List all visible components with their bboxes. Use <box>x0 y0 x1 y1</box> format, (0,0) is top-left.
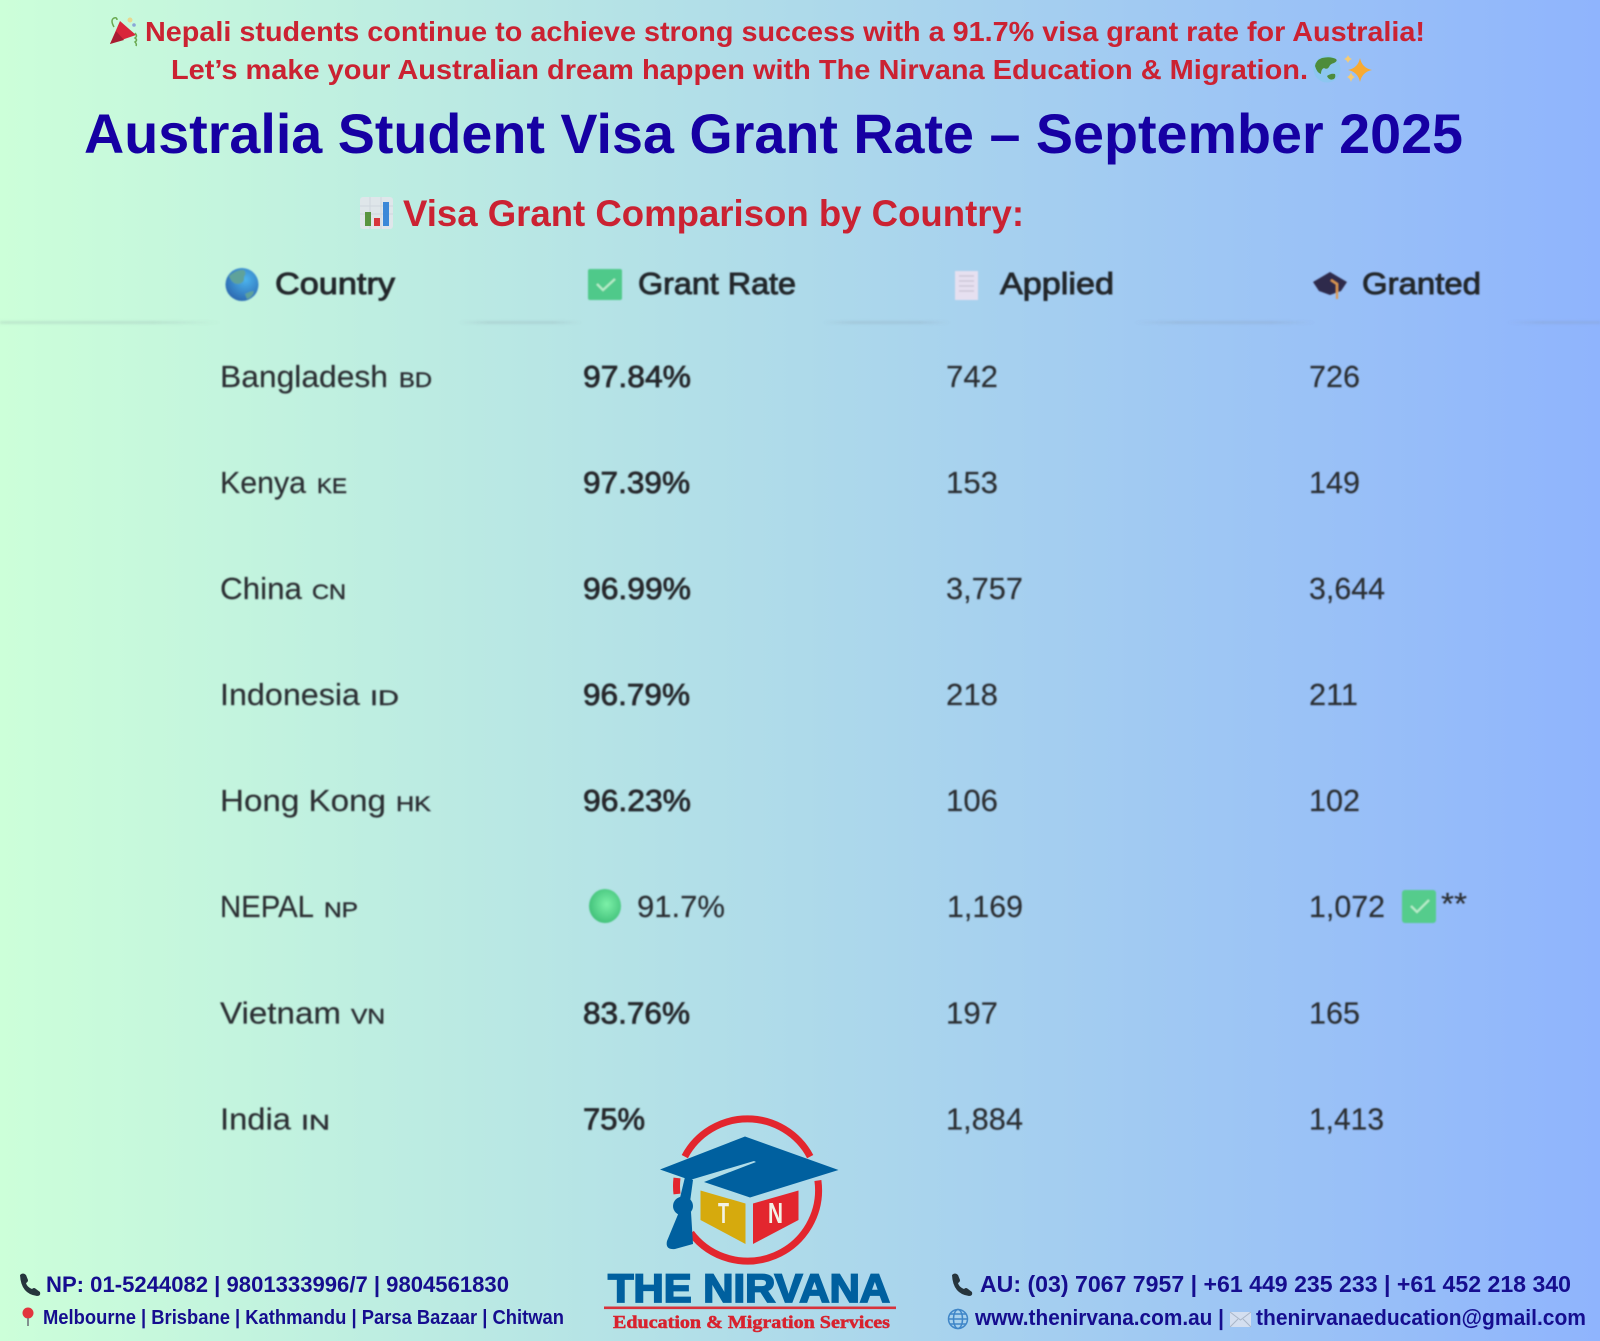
headline line 2: Let’s make your Australian dream happen with The Nirvana Education & Migration. <box>171 54 1308 85</box>
row: Kenya <box>220 465 1360 500</box>
email: thenirvanaeducation@gmail.com <box>1256 1305 1586 1330</box>
row: India <box>220 1102 1384 1136</box>
row: Vietnam: Vietnam <box>220 996 341 1030</box>
row: Kenya: Kenya <box>220 465 307 500</box>
row: India: 1,413 <box>1309 1102 1384 1136</box>
logo: The Nirvana <box>604 1119 896 1332</box>
row: Hong Kong: HK <box>396 793 431 816</box>
header: granted: Granted <box>1362 267 1481 301</box>
logo wordmark: THE NIRVANA <box>608 1267 890 1311</box>
row: Vietnam: 197 <box>946 996 998 1030</box>
row: Bangladesh: 97.84% <box>583 359 691 394</box>
row: Nepal: ** <box>1441 886 1467 921</box>
icon: web globe <box>948 1310 968 1328</box>
row: Indonesia: 211 <box>1309 677 1358 712</box>
row: India: 75% <box>583 1102 645 1136</box>
icon: green circle <box>589 889 621 923</box>
row: Hong Kong: 106 <box>946 783 998 818</box>
row: Kenya: 97.39% <box>583 465 690 500</box>
logo: yellow page <box>700 1190 746 1244</box>
row: Indonesia: 96.79% <box>583 677 690 712</box>
header: grant rate: Grant Rate <box>638 267 796 301</box>
row: India: India <box>220 1102 292 1136</box>
row: Nepal: 91.7% <box>637 889 725 924</box>
row: Nepal <box>220 886 1467 924</box>
row: China: CN <box>312 581 346 604</box>
icon: sparkles <box>1344 55 1372 82</box>
row: India: 1,884 <box>946 1102 1023 1136</box>
row: Bangladesh <box>220 359 1360 394</box>
row: China: 3,644 <box>1309 571 1385 606</box>
logo tagline: Education & Migration Services <box>613 1312 890 1332</box>
Australia phone numbers: AU: (03) 7067 7957 | +61 449 235 233 | +61 452 218 340 <box>980 1271 1571 1297</box>
row: Bangladesh: Bangladesh <box>220 359 388 394</box>
row: Nepal: 1,169 <box>947 889 1023 924</box>
row: Hong Kong: Hong Kong <box>220 783 386 818</box>
table: visa grant comparison <box>0 267 1600 1136</box>
icon: phone <box>20 1274 40 1296</box>
icon: bar chart <box>360 197 393 229</box>
row: Indonesia: 218 <box>946 677 998 712</box>
row: Nepal: 1,072 <box>1309 889 1385 924</box>
footer contacts: Nepal <box>20 1272 564 1329</box>
Nepal phone numbers: NP: 01-5244082 | 9801333996/7 | 9804561830 <box>46 1272 509 1297</box>
icon: globe header <box>226 268 258 301</box>
row: Indonesia <box>220 677 1358 712</box>
subheading <box>360 193 1024 234</box>
table header <box>0 267 1600 324</box>
footer contacts: Australia <box>948 1271 1586 1330</box>
row: China: 96.99% <box>583 571 691 606</box>
icon: check mark header <box>588 269 622 300</box>
icon: globe <box>1314 56 1340 82</box>
intro message <box>110 16 1425 85</box>
row: Hong Kong <box>220 783 1360 818</box>
icon: map pin <box>22 1308 34 1326</box>
office locations: Melbourne | Brisbane | Kathmandu | Parsa Bazaar | Chitwan <box>43 1307 564 1329</box>
icon: party popper <box>110 18 136 46</box>
comparison heading: Visa Grant Comparison by Country: <box>403 193 1024 234</box>
row: Indonesia: Indonesia <box>220 677 361 712</box>
row: Indonesia: ID <box>370 687 399 710</box>
icon: check mark <box>1402 890 1436 923</box>
row: Vietnam: 83.76% <box>583 996 690 1030</box>
title: Australia Student Visa Grant Rate – September 2025 <box>84 102 1463 165</box>
logo: red page <box>753 1190 798 1244</box>
row: Bangladesh: 726 <box>1309 359 1360 394</box>
logo: letter T: T <box>718 1198 729 1230</box>
icon: graduation cap <box>1313 272 1347 299</box>
row: Nepal: NP <box>324 899 358 922</box>
logo: letter N: N <box>768 1198 783 1230</box>
row: Nepal: NEPAL <box>220 889 314 924</box>
row: Kenya: 153 <box>946 465 998 500</box>
icon: envelope <box>1230 1312 1251 1327</box>
icon: document <box>955 271 978 300</box>
row: Bangladesh: BD <box>399 369 432 392</box>
row: Hong Kong: 96.23% <box>583 783 691 818</box>
row: China <box>220 571 1385 606</box>
row: Bangladesh: 742 <box>946 359 998 394</box>
row: Vietnam: VN <box>351 1006 385 1028</box>
header: applied: Applied <box>1000 267 1114 301</box>
logo ring <box>676 1119 819 1261</box>
icon: phone <box>952 1274 972 1296</box>
row: Kenya: 149 <box>1309 465 1360 500</box>
row: Hong Kong: 102 <box>1309 783 1360 818</box>
row: Vietnam: 165 <box>1309 996 1360 1030</box>
website: www.thenirvana.com.au | <box>974 1305 1224 1330</box>
row: China: China <box>220 571 303 606</box>
row: China: 3,757 <box>946 571 1023 606</box>
logo: mortarboard <box>660 1136 838 1249</box>
row: India: IN <box>301 1112 330 1134</box>
header: country: Country <box>275 267 396 301</box>
row: Kenya: KE <box>317 475 347 498</box>
row: Vietnam <box>220 996 1360 1030</box>
headline line 1: Nepali students continue to achieve strong success with a 91.7% visa grant rate for Australia! <box>145 16 1425 47</box>
